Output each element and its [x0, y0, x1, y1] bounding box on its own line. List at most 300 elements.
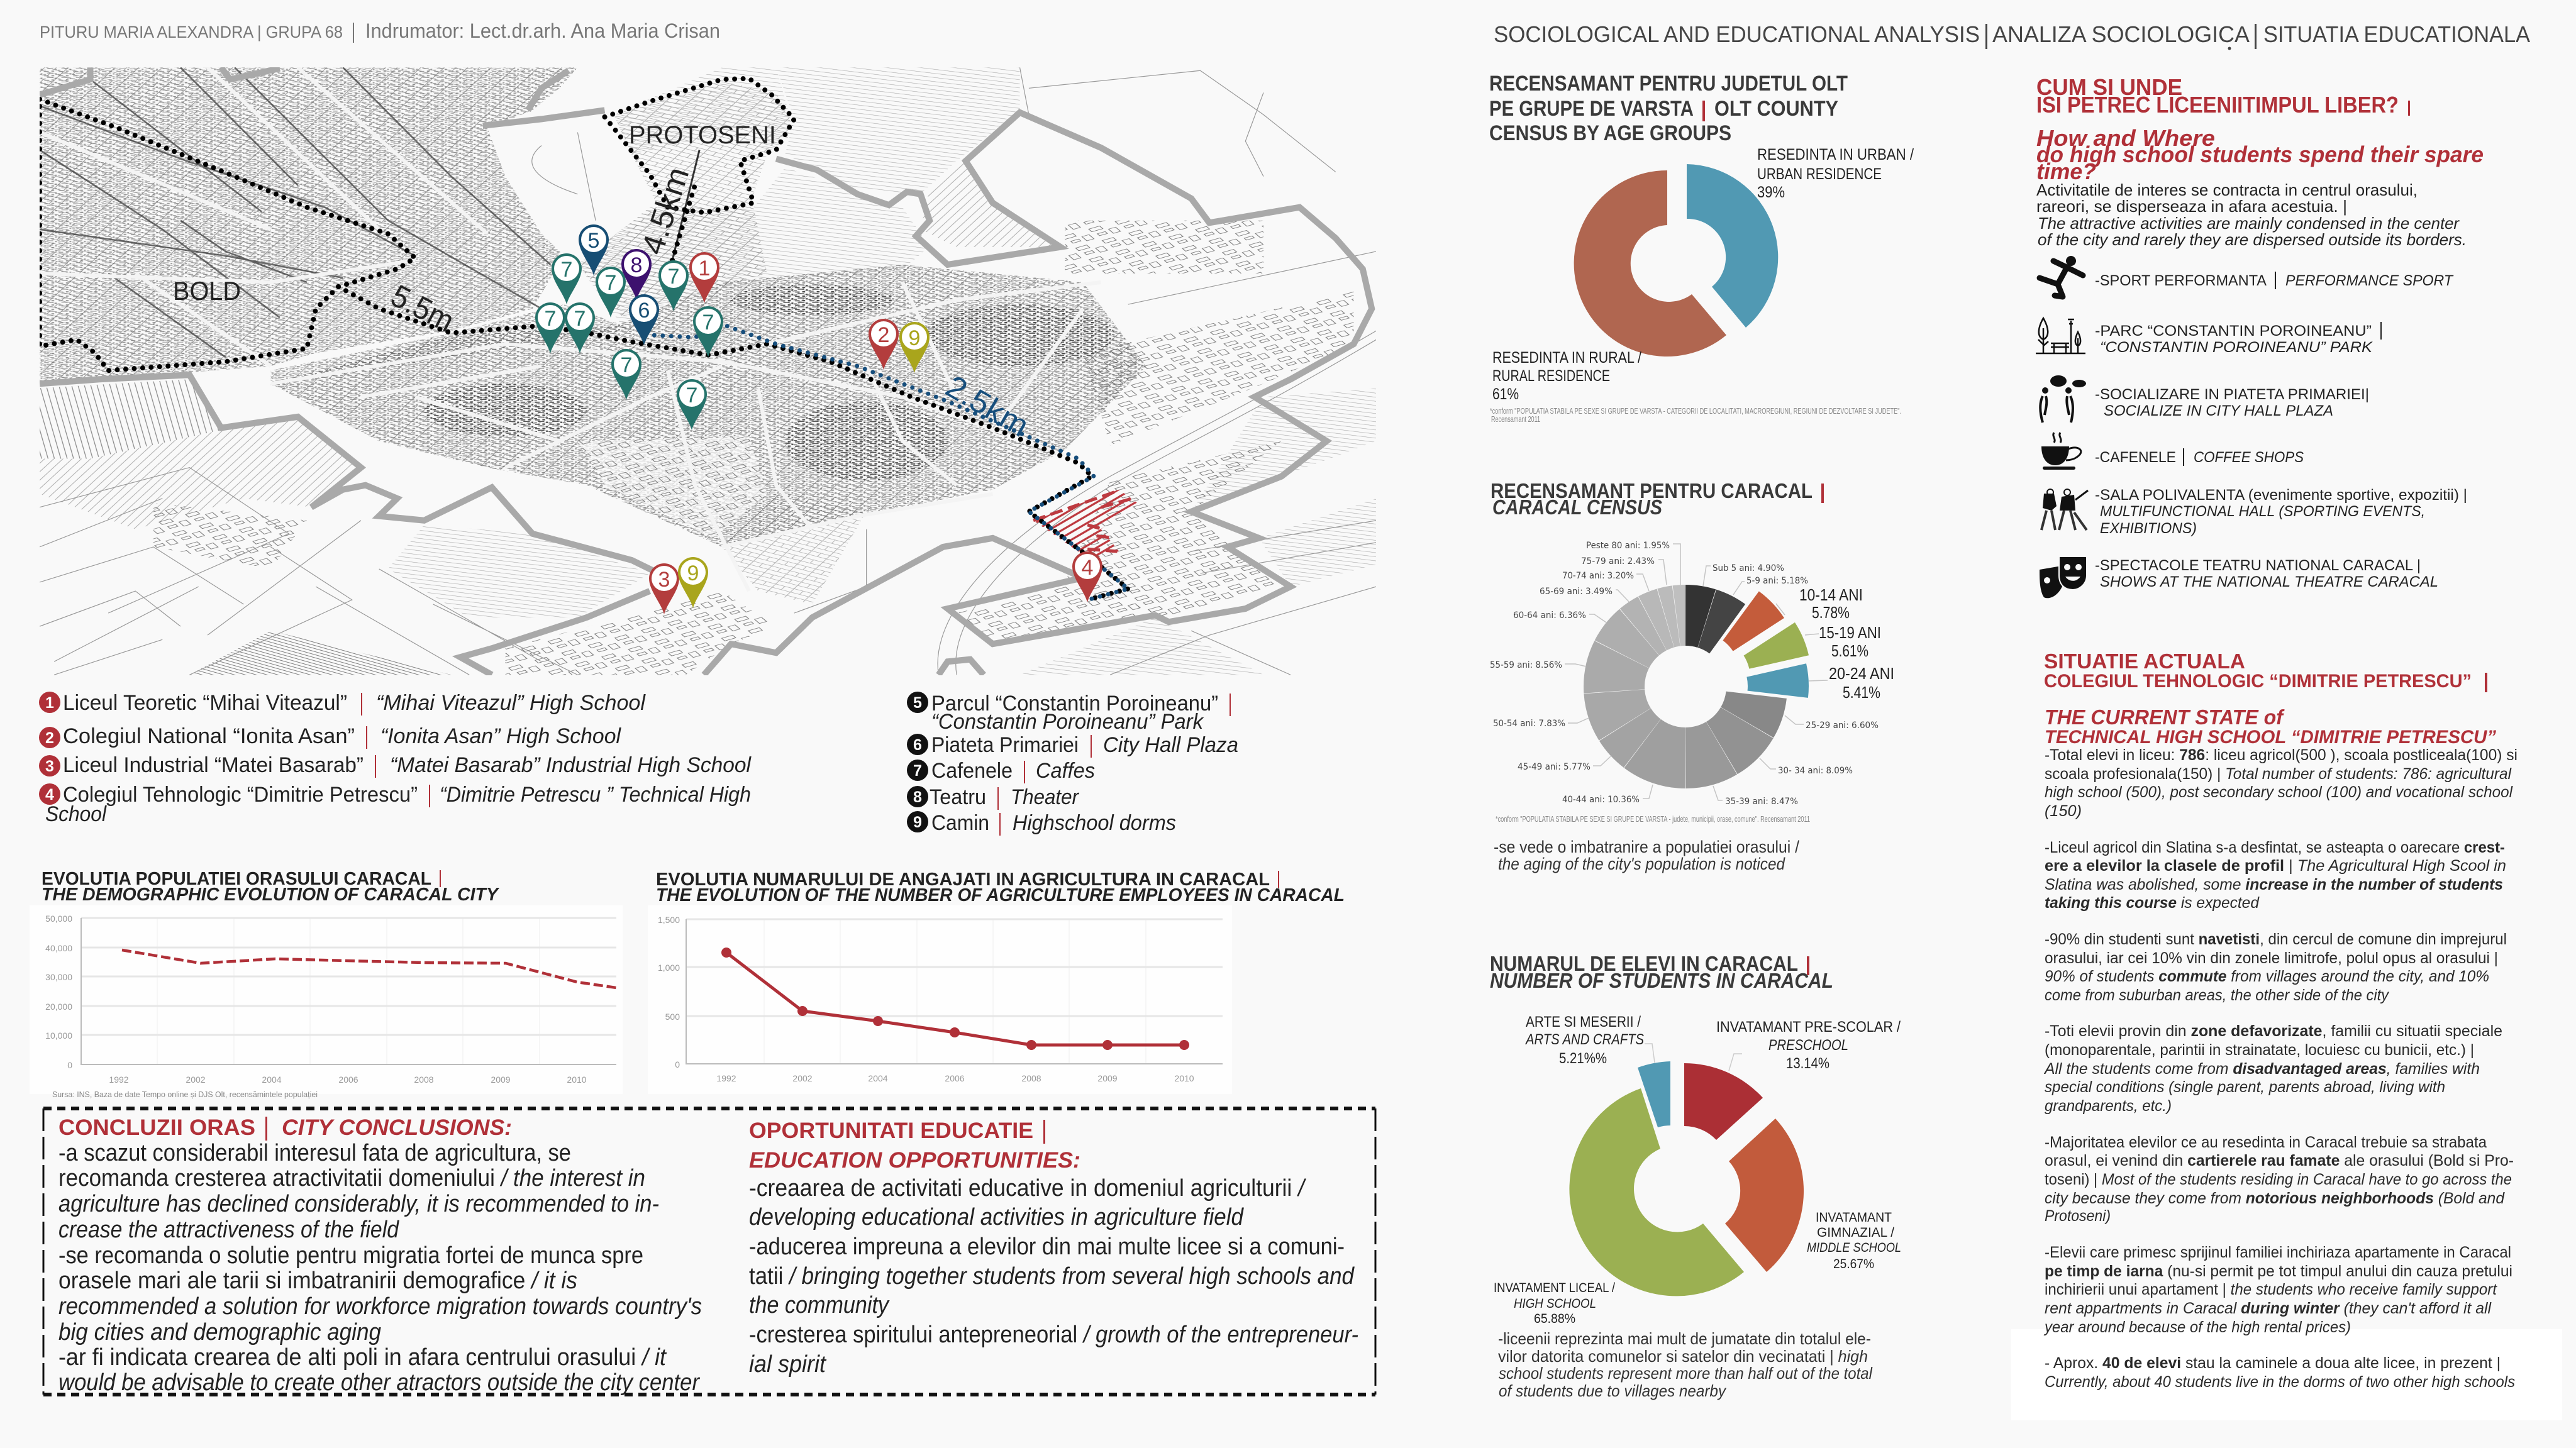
paragraph: winter rent: rent appartments in Caracal during winter (they can't afford it all	[2045, 1300, 2492, 1317]
activity: sport: PERFORMANCE SPORT	[2285, 272, 2454, 289]
icon: park	[2036, 318, 2085, 353]
x axis labels: 2010	[567, 1075, 587, 1085]
source note: *conform "POPULATIA STABILA PE SEXE SI GRUPE DE VARSTA - CATEGORII DE LOCALITATI, MACROREGIUNI, REGIUNI DE DEZVOLTARE SI JUDETE".	[1490, 406, 1901, 416]
pin 2 college: 2	[878, 323, 889, 347]
map pins	[535, 224, 1102, 614]
icon: coffee cup	[2041, 433, 2081, 470]
pin 7 cafe b: 7	[605, 271, 616, 295]
heading english: do high school students spend their spare	[2036, 141, 2484, 167]
x axis labels: 2006	[945, 1073, 965, 1083]
heading: CARACAL CENSUS	[1492, 495, 1662, 519]
paragraph: Slatina school: taking this course is expected	[2045, 894, 2260, 912]
legend item 6: 6	[913, 736, 922, 754]
pin 9 dorm south: 9	[687, 561, 699, 585]
y axis labels: 20,000	[45, 1002, 72, 1012]
white note panel	[2011, 1329, 2562, 1420]
y axis labels: 1,500	[658, 915, 680, 925]
activity: sport: -SPORT PERFORMANTA	[2095, 272, 2267, 289]
label: preschool: 13.14%	[1786, 1055, 1829, 1072]
y axis labels: 40,000	[45, 943, 72, 953]
x axis labels: 2009	[491, 1075, 511, 1085]
legend item 8: Teatru	[930, 785, 986, 809]
activity: socializing: SOCIALIZE IN CITY HALL PLAZA	[2104, 402, 2333, 419]
body: -a scazut considerabil interesul fata de agricultura, se	[58, 1140, 571, 1166]
pin 6 plaza: 6	[638, 299, 650, 323]
paragraph: neighborhoods: city because they come from notorious neighborhoods (Bold and	[2045, 1190, 2505, 1207]
paragraph: winter rent: -Elevii care primesc sprijinul familiei inchiriaza apartamente in Caracal	[2045, 1244, 2511, 1261]
legend item 3: “Matei Basarab” Industrial High School	[390, 753, 752, 777]
dashed conclusions box	[43, 1108, 1375, 1396]
donut chart: age groups	[1614, 602, 1781, 758]
heading: agriculture employees chart	[656, 870, 1345, 905]
intro paragraph: rareori, se disperseaza in afara acestuia. |	[2036, 197, 2347, 216]
x axis labels: 1992	[716, 1073, 736, 1083]
paragraph: commuters: come from suburban areas, the other side of the city	[2045, 987, 2389, 1004]
label: middle school: MIDDLE SCHOOL	[1807, 1241, 1901, 1255]
age group labels: 70-74 ani: 3.20%	[1562, 571, 1634, 581]
pin 5 park	[579, 224, 609, 275]
data line	[122, 950, 616, 988]
city conclusions	[58, 1115, 702, 1396]
map fields and urban texture	[40, 67, 1376, 675]
label: arts and crafts: ARTE SI MESERII /	[1526, 1014, 1641, 1031]
heading: agriculture employees chart: EVOLUTIA NUMARULUI DE ANGAJATI IN AGRICULTURA IN CARACAL	[656, 870, 1270, 890]
x axis labels: 2008	[1021, 1073, 1041, 1083]
legend item 1: “Mihai Viteazul” High School	[376, 691, 646, 715]
dotted route: Protoseni	[604, 79, 794, 260]
observation	[1498, 1329, 1873, 1400]
legend item 6	[907, 733, 1238, 758]
map label: 2.5 km distance: 2.5km	[940, 368, 1035, 444]
map: Caracal city plan	[40, 67, 1376, 675]
label: high school: INVATAMENT LICEAL /	[1494, 1281, 1615, 1295]
y axis labels	[658, 915, 680, 1069]
y axis labels	[45, 914, 72, 1070]
title: analysis	[1494, 21, 2530, 50]
heading: CENSUS BY AGE GROUPS	[1489, 121, 1731, 145]
source note: Recensamant 2011	[1491, 414, 1540, 424]
y axis labels: 1,000	[658, 963, 680, 973]
panel: free time	[2036, 74, 2484, 598]
label: high school: HIGH SCHOOL	[1514, 1296, 1596, 1311]
observation: school students represent more than half out of the total	[1499, 1364, 1873, 1383]
body: recommended a solution for workforce migration towards country's	[58, 1293, 702, 1320]
label: urban	[1757, 146, 1914, 201]
header: author and tutor	[40, 19, 720, 43]
activity: multifunctional hall: EXHIBITIONS)	[2100, 520, 2197, 537]
map main roads	[40, 67, 1101, 591]
map city boundary	[40, 67, 1372, 675]
heading english: How and Where	[2036, 125, 2215, 151]
label: middle school: 25.67%	[1833, 1257, 1874, 1271]
pin 3 industrial high school: 3	[658, 568, 670, 592]
heading: NUMBER OF STUDENTS IN CARACAL	[1490, 969, 1833, 992]
age group labels: 60-64 ani: 6.36%	[1513, 611, 1586, 621]
heading: agriculture employees chart: THE EVOLUTION OF THE NUMBER OF AGRICULTURE EMPLOYEES IN CARACAL	[656, 885, 1345, 905]
label: high school	[1494, 1281, 1615, 1326]
dotted route: Bold	[40, 99, 415, 370]
paragraph: totals: -Total elevi in liceu: 786: liceu agricol(500 ), scoala postliceala(100) si	[2045, 746, 2518, 764]
paragraph: dorms: Currently, about 40 students live in the dorms of two other high schools	[2045, 1373, 2515, 1391]
map thin lines	[40, 67, 1376, 675]
x axis labels	[716, 1073, 1194, 1083]
label: preschool: PRESCHOOL	[1768, 1037, 1848, 1054]
map label: Bold: BOLD	[173, 276, 241, 306]
map label: 4.5 km distance: 4.5km	[635, 163, 696, 258]
heading: population chart: THE DEMOGRAPHIC EVOLUTION OF CARACAL CITY	[42, 885, 500, 905]
observation: vilor datorita comunelor si satelor din vecinatati | high	[1498, 1347, 1868, 1366]
paragraph: Slatina school: Slatina was abolished, some increase in the number of students	[2045, 876, 2503, 893]
body	[58, 1140, 702, 1396]
legend item 5: 5	[913, 694, 922, 712]
x axis labels: 1992	[109, 1075, 129, 1085]
legend item 7: 7	[913, 762, 922, 780]
y axis labels: 10,000	[45, 1031, 72, 1041]
body	[749, 1175, 1358, 1378]
pin 7 cafe h	[677, 379, 707, 430]
x axis labels: 2002	[186, 1075, 206, 1085]
heading	[1489, 72, 1848, 145]
age group labels: Sub 5 ani: 4.90%	[1713, 563, 1784, 573]
label: preschool: INVATAMANT PRE-SCOLAR /	[1716, 1019, 1901, 1036]
icon: multifunctional hall	[2041, 489, 2088, 530]
pin 8 theatre: 8	[631, 253, 642, 277]
paragraph: totals: (150)	[2045, 802, 2082, 820]
title: analysis: SITUATIA EDUCATIONALA	[2263, 21, 2530, 47]
highlighted labels: 5.78%	[1812, 603, 1850, 622]
heading english: TECHNICAL HIGH SCHOOL “DIMITRIE PETRESCU”	[2045, 727, 2496, 748]
activity: socializing	[2095, 386, 2369, 419]
legend item 3: Liceul Industrial “Matei Basarab”	[63, 753, 364, 777]
body: -creaarea de activitati educative in domeniul agriculturii /	[749, 1175, 1306, 1202]
pin 7 cafe c	[658, 260, 689, 311]
intro paragraph: of the city and rarely they are dispersed outside its borders.	[2038, 230, 2467, 249]
age group labels: 65-69 ani: 3.49%	[1540, 587, 1613, 597]
label: rural	[1492, 349, 1641, 403]
x axis labels: 2006	[338, 1075, 358, 1085]
paragraph: Slatina school: -Liceul agricol din Slatina s-a desfintat, se asteapta o oarecare crest-	[2045, 839, 2505, 856]
y axis labels: 0	[67, 1060, 72, 1070]
label: urban: RESEDINTA IN URBAN /	[1757, 146, 1914, 163]
activity: sport	[2095, 272, 2454, 289]
heading: RECENSAMANT PENTRU CARACAL	[1491, 479, 1813, 502]
pin 7 cafe e: 7	[545, 307, 556, 331]
age group labels: 5-9 ani: 5.18%	[1746, 576, 1808, 586]
leader lines	[1565, 544, 1828, 800]
paragraph: disadvantaged areas: (monoparentale, parintii in strainatate, locuiesc cu bunicii, etc.) |	[2045, 1041, 2474, 1059]
age group labels: 50-54 ani: 7.83%	[1493, 719, 1565, 729]
age group labels	[1490, 541, 1879, 807]
paragraph: disadvantaged areas: special conditions (single parent, parents abroad, living with	[2045, 1078, 2445, 1096]
highlighted labels: 15-19 ANI	[1819, 623, 1881, 642]
age group labels: 45-49 ani: 5.77%	[1518, 762, 1591, 772]
x axis labels: 2002	[792, 1073, 813, 1083]
title: analysis: ANALIZA SOCIOLOGICA	[1992, 21, 2250, 47]
panel: current state	[2011, 649, 2562, 1420]
legend item 8: Theater	[1011, 785, 1080, 809]
body: orasele mari ale tarii si imbatranirii demografice / it is	[58, 1268, 577, 1294]
pin 2 college	[869, 319, 899, 370]
paragraph: disadvantaged areas: All the students come from disadvantaged areas, families with	[2043, 1060, 2480, 1078]
legend item 4	[39, 783, 751, 826]
paragraph: neighborhoods: toseni) | Most of the students residing in Caracal have to go across the	[2045, 1171, 2512, 1188]
heading: CONCLUZII ORAS	[58, 1115, 255, 1140]
paragraph: neighborhoods	[2045, 1134, 2514, 1225]
pin 3 industrial high school	[649, 563, 679, 614]
heading: population chart	[42, 869, 500, 905]
activity: socializing: -SOCIALIZARE IN PIATETA PRIMARIEI|	[2095, 386, 2369, 403]
pin 7 cafe g	[611, 349, 641, 400]
activity: theatre	[2095, 557, 2438, 590]
legend: schools	[39, 691, 752, 826]
pin 4 technical college	[1072, 551, 1102, 602]
legend item 8: 8	[913, 788, 922, 806]
legend item 4: “Dimitrie Petrescu ” Technical High	[440, 783, 751, 807]
legend item 5: “Constantin Poroineanu” Park	[931, 710, 1204, 734]
heading: CITY CONCLUSIONS:	[282, 1115, 512, 1140]
panel: Caracal census	[1490, 479, 1894, 873]
legend item 6: City Hall Plaza	[1103, 733, 1238, 757]
legend item 2: 2	[45, 729, 54, 747]
map label: 5.5 km distance: 5.5m	[386, 278, 460, 339]
label: arts and crafts: 5.21%%	[1559, 1050, 1607, 1067]
legend item 7	[907, 759, 1095, 783]
legend item 1: Liceul Teoretic “Mihai Viteazul”	[63, 691, 347, 715]
intro paragraph: The attractive activities are mainly condensed in the center	[2038, 214, 2460, 233]
paragraph: winter rent: inchirierii unui apartament | the students who receive family support	[2045, 1281, 2497, 1298]
label: rural: RURAL RESIDENCE	[1492, 367, 1610, 385]
pin 9 dorm: 9	[909, 326, 920, 350]
activity: cafes: -CAFENELE	[2095, 449, 2176, 466]
intro paragraph	[2036, 180, 2467, 249]
pin 1 high school: 1	[699, 257, 710, 280]
pin 8 theatre	[621, 249, 652, 300]
source note: *conform "POPULATIA STABILA PE SEXE SI GRUPE DE VARSTA - judete, municipii, orase, comune". Recensamant 2011	[1496, 814, 1810, 824]
legend item 3	[39, 753, 752, 778]
x axis labels: 2008	[414, 1075, 434, 1085]
activity: multifunctional hall: -SALA POLIVALENTA (evenimente sportive, expozitii) |	[2095, 487, 2467, 504]
activity: park	[2095, 322, 2382, 356]
icon: sport	[2040, 256, 2083, 297]
pin 4 technical college: 4	[1082, 556, 1093, 580]
paragraph: winter rent: pe timp de iarna (nu-si permit pe tot timpul anului din cauza pretului	[2045, 1263, 2512, 1280]
body: would be advisable to create other atractors outside the city center	[58, 1369, 700, 1396]
heading english: time?	[2036, 158, 2096, 184]
heading romanian: COLEGIUL TEHNOLOGIC “DIMITRIE PETRESCU”	[2044, 671, 2472, 692]
map label: Protoseni: PROTOSENI	[629, 121, 776, 149]
body: the community	[749, 1292, 890, 1318]
paragraph: Slatina school	[2045, 839, 2506, 912]
body: agriculture has declined considerably, it is recommended to in-	[58, 1191, 659, 1217]
y axis labels: 30,000	[45, 972, 72, 982]
age group labels: 40-44 ani: 10.36%	[1562, 795, 1640, 805]
legend item 2: Colegiul National “Ionita Asan”	[63, 724, 355, 748]
paragraph: disadvantaged areas	[2043, 1022, 2502, 1115]
dotted route: 5.5 km to the site	[338, 287, 1128, 600]
pin 9 dorm	[899, 322, 930, 373]
pin 7 cafe e	[535, 302, 565, 353]
highlighted labels: 5.41%	[1843, 683, 1880, 702]
heading	[749, 1119, 1080, 1173]
icon: socializing	[2040, 375, 2086, 423]
legend item 9: Camin	[931, 811, 989, 835]
line chart: agriculture employees	[648, 905, 1232, 1094]
body: ial spirit	[749, 1351, 826, 1378]
walking route to Protoseni	[672, 150, 699, 260]
legend item 5: Parcul “Constantin Poroineanu”	[931, 692, 1218, 716]
education opportunities	[749, 1119, 1358, 1378]
pin 7 cafe c: 7	[668, 265, 679, 289]
paragraph: dorms: - Aprox. 40 de elevi stau la caminele a doua alte licee, in prezent |	[2045, 1354, 2501, 1372]
paragraph: neighborhoods: -Majoritatea elevilor ce au resedinta in Caracal trebuie sa strabata	[2045, 1134, 2487, 1151]
label: urban: 39%	[1757, 184, 1785, 201]
x axis labels: 2010	[1174, 1073, 1194, 1083]
legend item 4: 4	[45, 786, 54, 804]
pin 7 cafe f	[565, 302, 595, 353]
heading: population chart: EVOLUTIA POPULATIEI ORASULUI CARACAL	[42, 869, 431, 889]
intro paragraph: Activitatile de interes se contracta in centrul orasului,	[2036, 180, 2418, 199]
body: -ar fi indicata crearea de alti poli in afara centrului orasului / it	[58, 1344, 667, 1371]
donut chart: education levels	[1569, 1044, 1804, 1296]
heading romanian	[2044, 649, 2487, 692]
label: arts and crafts	[1524, 1014, 1644, 1067]
heading english: THE CURRENT STATE of	[2045, 705, 2285, 729]
icon: theatre masks	[2040, 556, 2087, 598]
legend item 4: Colegiul Tehnologic “Dimitrie Petrescu”	[63, 783, 418, 807]
body: recomanda cresterea atractivitatii domeniului / the interest in	[58, 1165, 645, 1191]
activity: park: -PARC “CONSTANTIN POROINEANU”	[2095, 323, 2372, 340]
highlighted labels	[1799, 585, 1894, 702]
heading english	[2045, 705, 2496, 748]
paragraph: winter rent	[2043, 1244, 2512, 1336]
data line	[721, 948, 1189, 1050]
highlighted labels: 5.61%	[1831, 641, 1868, 660]
project site hatch	[1033, 490, 1137, 558]
pin 7 cafe d: 7	[702, 311, 714, 334]
header: author and tutor: PITURU MARIA ALEXANDRA | GRUPA 68	[40, 23, 343, 41]
activity: cafes: COFFEE SHOPS	[2194, 449, 2304, 466]
body: crease the attractiveness of the field	[58, 1217, 400, 1243]
heading: NUMARUL DE ELEVI IN CARACAL	[1490, 952, 1798, 975]
panel: Olt county census	[1489, 72, 1914, 424]
paragraph: dorms	[2045, 1354, 2515, 1391]
observation	[1494, 837, 1799, 873]
heading	[1491, 479, 1824, 519]
y axis labels: 0	[675, 1059, 680, 1069]
dotted route: 2.5 km	[654, 324, 1128, 600]
legend item 8	[907, 785, 1080, 810]
paragraph: commuters: 90% of students commute from villages around the city, and 10%	[2045, 968, 2489, 985]
observation: -liceenii reprezinta mai mult de jumatate din totalul ele-	[1498, 1329, 1871, 1348]
activity: park: “CONSTANTIN POROINEANU” PARK	[2100, 339, 2373, 356]
pin 7 cafe b	[596, 267, 626, 318]
paragraph: neighborhoods: Protoseni)	[2045, 1207, 2111, 1225]
label: arts and crafts: ARTS AND CRAFTS	[1524, 1031, 1644, 1048]
legend item 1	[39, 691, 646, 716]
pin 7 cafe f: 7	[574, 307, 586, 331]
x axis labels: 2004	[262, 1075, 282, 1085]
observation: of students due to villages nearby	[1499, 1381, 1727, 1400]
heading romanian: ISI PETREC LICEENIITIMPUL LIBER?	[2036, 92, 2399, 118]
heading: OPORTUNITATI EDUCATIE	[749, 1119, 1033, 1143]
heading	[58, 1115, 512, 1141]
y axis labels: 500	[665, 1012, 680, 1022]
body: big cities and demographic aging	[58, 1319, 381, 1346]
heading: PE GRUPE DE VARSTA	[1489, 97, 1694, 121]
label: middle school	[1807, 1210, 1901, 1271]
map streets	[40, 67, 550, 357]
legend item 6: Piateta Primariei	[931, 733, 1079, 757]
label: middle school: INVATAMANT	[1816, 1210, 1892, 1225]
line chart: population	[30, 905, 623, 1099]
pin 7 cafe h: 7	[686, 384, 697, 407]
body: developing educational activities in agriculture field	[749, 1204, 1245, 1230]
pin 7 cafe a	[552, 253, 582, 304]
observation: -se vede o imbatranire a populatiei orasului /	[1494, 837, 1799, 856]
body: -aducerea impreuna a elevilor din mai multe licee si a comuni-	[749, 1234, 1345, 1260]
heading romanian: SITUATIE ACTUALA	[2044, 649, 2245, 673]
age group labels: 75-79 ani: 2.43%	[1581, 556, 1655, 566]
legend item 9	[907, 811, 1176, 836]
source note: Sursa: INS, Baza de date Tempo online și DJS Olt, recensămintele populației	[52, 1090, 318, 1099]
legend item 2: “Ionita Asan” High School	[380, 724, 621, 748]
header: author and tutor: Indrumator: Lect.dr.arh. Ana Maria Crisan	[365, 19, 720, 42]
label: preschool	[1716, 1019, 1901, 1072]
activity: theatre: SHOWS AT THE NATIONAL THEATRE CARACAL	[2100, 573, 2438, 590]
x axis labels: 2009	[1097, 1073, 1118, 1083]
age group labels: 25-29 ani: 6.60%	[1806, 721, 1879, 731]
body: tatii / bringing together students from several high schools and	[749, 1263, 1355, 1290]
paragraph: totals	[2045, 746, 2518, 820]
heading romanian: CUM SI UNDE	[2036, 74, 2182, 100]
legend item 9: Highschool dorms	[1013, 811, 1176, 835]
pin 9 dorm south	[678, 557, 708, 608]
label: rural: RESEDINTA IN RURAL /	[1492, 349, 1641, 367]
heading: EDUCATION OPPORTUNITIES:	[749, 1148, 1080, 1173]
legend item 3: 3	[45, 758, 54, 775]
pin 1 high school	[689, 252, 719, 303]
legend: places	[907, 692, 1238, 836]
pin 5 park: 5	[588, 229, 599, 253]
paragraph: commuters: orasului, iar cei 10% vin din zonele limitrofe, polul opus al orasului |	[2045, 949, 2498, 967]
activity: theatre: -SPECTACOLE TEATRU NATIONAL CARACAL |	[2095, 557, 2421, 574]
heading english	[2036, 125, 2484, 184]
activity: multifunctional hall	[2095, 487, 2467, 537]
body: -cresterea spiritului antepreneorial / growth of the entrepreneur-	[749, 1322, 1358, 1348]
label: middle school: GIMNAZIAL /	[1817, 1225, 1894, 1240]
label: urban: URBAN RESIDENCE	[1757, 165, 1882, 183]
highlighted labels: 20-24 ANI	[1829, 664, 1894, 683]
observation: the aging of the city's population is noticed	[1498, 854, 1785, 873]
paragraph: totals: high school (500), post secondary school (100) and vocational school	[2045, 783, 2513, 801]
legend item 7: Caffes	[1036, 759, 1095, 783]
paragraph: totals: scoala profesionala(150) | Total number of students: 786: agricultural	[2045, 765, 2512, 783]
paragraph: commuters: -90% din studenti sunt navetisti, din cercul de comune din imprejurul	[2045, 931, 2507, 948]
legend item 5	[907, 692, 1231, 734]
pin 7 cafe a: 7	[561, 258, 572, 282]
legend item 2	[39, 724, 621, 749]
age group labels: 55-59 ani: 8.56%	[1490, 660, 1562, 670]
heading	[1490, 952, 1833, 992]
age group labels: Peste 80 ani: 1.95%	[1586, 541, 1670, 551]
legend item 9: 9	[913, 814, 922, 831]
paragraph: Slatina school: ere a elevilor la clasele de profil | The Agricultural High Scool in	[2045, 857, 2506, 875]
paragraph: disadvantaged areas: grandparents, etc.)	[2045, 1097, 2172, 1115]
paragraph: neighborhoods: orasul, ei venind din cartierele rau famate ale orasului (Bold si Pro-	[2045, 1152, 2514, 1169]
body: -se recomanda o solutie pentru migratia fortei de munca spre	[58, 1242, 643, 1269]
pin 6 plaza	[629, 294, 659, 345]
legend item 7: Cafenele	[931, 759, 1013, 783]
